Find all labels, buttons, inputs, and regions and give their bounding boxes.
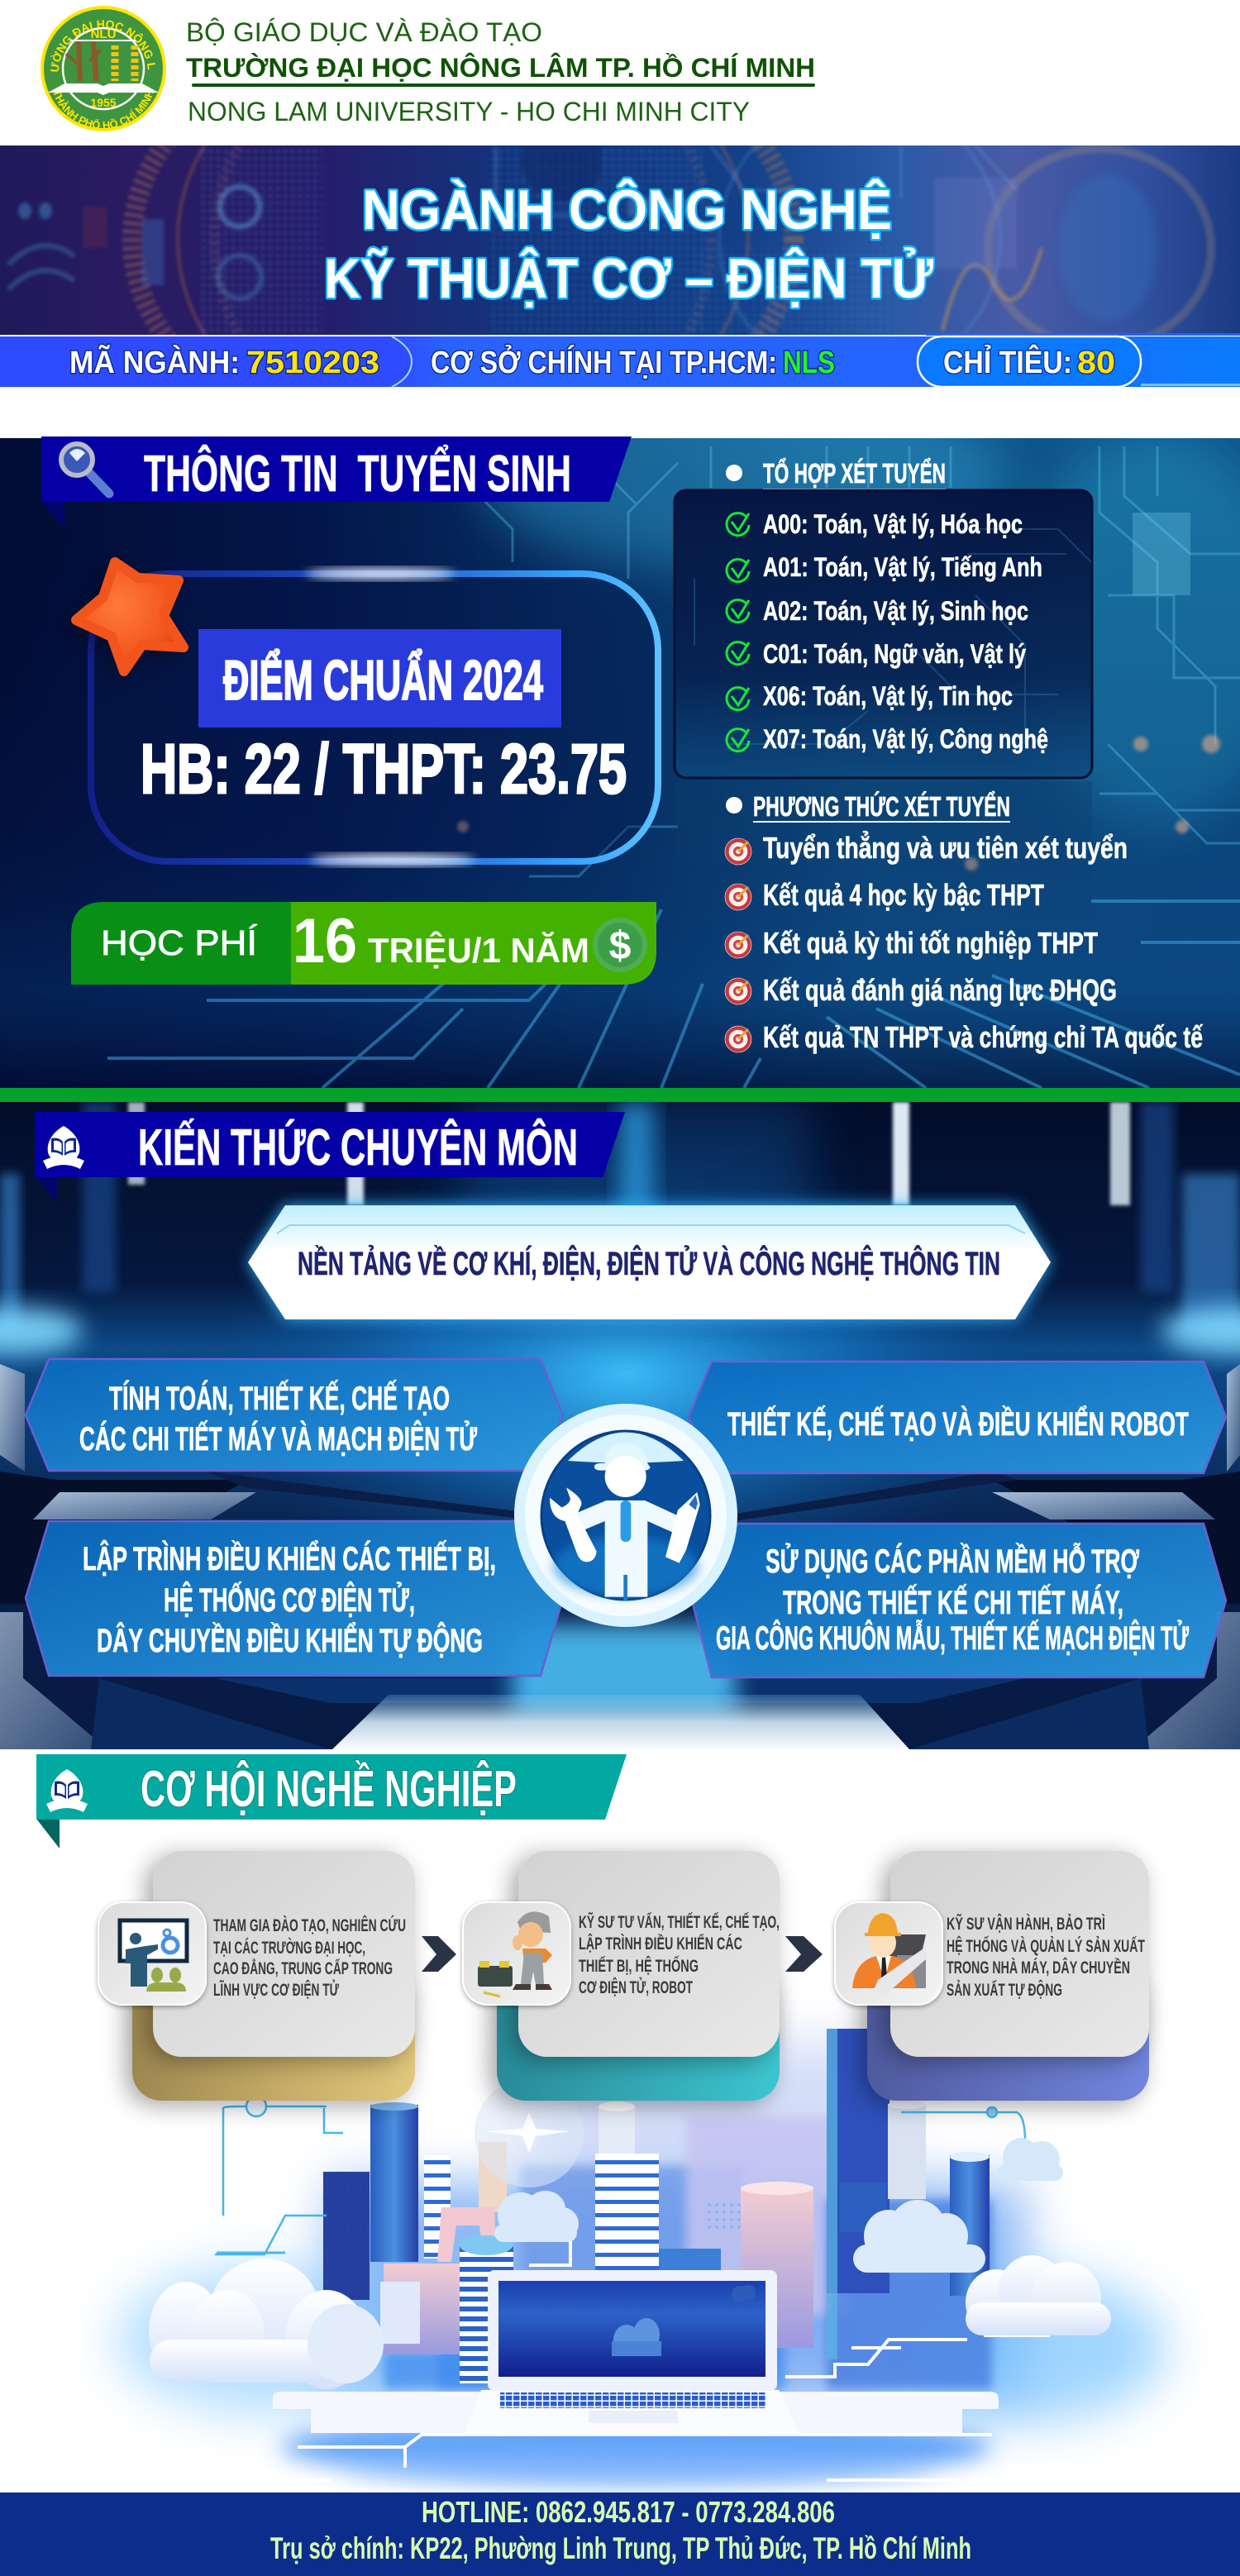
heading: admission information xyxy=(41,436,632,527)
pill: quota: 80 xyxy=(1077,346,1115,380)
text: consulting engineer: THIẾT BỊ, HỆ THỐNG xyxy=(579,1956,699,1976)
icon: teacher at board xyxy=(120,1920,187,1992)
illustration: smart city on a laptop xyxy=(116,2029,1166,2484)
icon: construction engineer xyxy=(852,1913,926,1994)
text: hotline: HOTLINE: 0862.945.817 - 0773.284.806 xyxy=(422,2495,835,2529)
text: teaching and research: LĨNH VỰC CƠ ĐIỆN TỬ xyxy=(213,1980,339,2000)
background: circuit board texture xyxy=(0,389,1240,1088)
text: operations engineer: KỸ SƯ VẬN HÀNH, BẢO TRÌ xyxy=(947,1914,1105,1934)
callout: tuition: HỌC PHÍ xyxy=(101,923,257,963)
box: software support xyxy=(692,1524,1226,1677)
panel: admission methods xyxy=(725,791,1204,1054)
label: score heading xyxy=(198,629,561,727)
box: calculation and design: CÁC CHI TIẾT MÁY VÀ MẠCH ĐIỆN TỬ xyxy=(79,1419,478,1457)
title xyxy=(324,178,934,310)
logo: Nong Lam University seal xyxy=(41,6,166,131)
heading: admission methods: PHƯƠNG THỨC XÉT TUYỂN xyxy=(753,791,1010,822)
box: calculation and design: TÍNH TOÁN, THIẾT KẾ, CHẾ TẠO xyxy=(109,1379,450,1417)
arrow: second to third xyxy=(785,1936,823,1972)
text: teaching and research xyxy=(213,1915,406,2000)
heading: subject combinations: TỔ HỢP XÉT TUYỂN xyxy=(763,458,946,489)
list: admission methods xyxy=(725,830,1204,1054)
text: ministry line: BỘ GIÁO DỤC VÀ ĐÀO TẠO xyxy=(186,17,542,47)
info bar: major code, campus, quota xyxy=(0,333,1240,387)
arrow: first to second xyxy=(422,1936,456,1972)
list: admission methods: Tuyển thẳng và ưu tiên xét tuyển xyxy=(763,830,1128,865)
list: admission methods: Kết quả kỳ thi tốt nghiệp THPT xyxy=(763,926,1098,960)
text: operations engineer: HỆ THỐNG VÀ QUẢN LÝ SẢN XUẤT xyxy=(947,1936,1145,1956)
divider under university name xyxy=(192,83,815,87)
text: major code xyxy=(69,344,379,380)
callout: tuition: 16 xyxy=(293,906,357,976)
text: score values: HB: 22 / THPT: 23.75 xyxy=(141,730,627,808)
heading: professional knowledge xyxy=(35,1112,625,1203)
card: teaching and research xyxy=(98,1851,415,2101)
text: campus: NLS xyxy=(783,346,835,380)
text: major code: 7510203 xyxy=(246,346,379,380)
logo: Nong Lam University seal: THÀNH PHỐ HỒ CHÍ MINH xyxy=(53,93,154,128)
title: NGÀNH CÔNG NGHỆ xyxy=(362,178,892,241)
background: sci-fi hall xyxy=(0,1102,1240,1749)
box: combination list: A01: Toán, Vật lý, Tiếng Anh xyxy=(763,552,1042,582)
box: programming control: DÂY CHUYỀN ĐIỀU KHIỂN TỰ ĐỘNG xyxy=(97,1620,483,1659)
icon: magnifier xyxy=(61,444,109,494)
text: teaching and research: TẠI CÁC TRƯỜNG ĐẠI HỌC, xyxy=(213,1938,365,1958)
box: foundation knowledge xyxy=(248,1205,1051,1319)
bullet xyxy=(726,797,742,813)
box: combination list: A00: Toán, Vật lý, Hóa học xyxy=(763,509,1023,539)
bullet xyxy=(726,465,742,481)
icon: dollar coin: $ xyxy=(609,924,632,968)
pill: quota xyxy=(918,336,1141,387)
heading: career opportunities xyxy=(36,1754,627,1849)
card: consulting engineer xyxy=(463,1851,780,2101)
callout: admission score 2024 xyxy=(76,562,658,865)
box: combination list: A02: Toán, Vật lý, Sinh học xyxy=(763,596,1028,626)
text: teaching and research: THAM GIA ĐÀO TẠO, NGHIÊN CỨU xyxy=(213,1915,406,1935)
panel: admission information xyxy=(0,389,1240,1088)
icon: book crest xyxy=(43,1126,84,1169)
box: combination list xyxy=(675,490,1092,778)
laptop xyxy=(273,2270,999,2433)
text: major code: MÃ NGÀNH: xyxy=(69,344,240,380)
icon: book crest xyxy=(46,1769,88,1812)
text: operations engineer xyxy=(947,1914,1145,2000)
logo: Nong Lam University seal: 1955 xyxy=(90,96,117,109)
callout: tuition xyxy=(71,902,656,985)
footer: contact xyxy=(0,2493,1240,2576)
green divider band xyxy=(0,1088,1240,1102)
box: programming control: LẬP TRÌNH ĐIỀU KHIỂN CÁC THIẾT BỊ, xyxy=(83,1538,496,1577)
box: programming control xyxy=(26,1521,563,1676)
banner: major title xyxy=(0,145,1240,335)
panel: career opportunities xyxy=(36,1754,1166,2484)
panel: professional knowledge xyxy=(0,1102,1240,1749)
icon: orange star xyxy=(76,562,184,671)
box: combination list: C01: Toán, Ngữ văn, Vật lý xyxy=(763,639,1026,669)
clouds xyxy=(149,2138,1111,2389)
box: robots xyxy=(689,1362,1226,1473)
circuit traces xyxy=(215,2097,1025,2254)
icon: engineer emblem xyxy=(514,1404,737,1627)
heading: professional knowledge: KIẾN THỨC CHUYÊN MÔN xyxy=(138,1119,578,1176)
list: admission methods: Kết quả 4 học kỳ bậc THPT xyxy=(763,878,1044,912)
text: operations engineer: SẢN XUẤT TỰ ĐỘNG xyxy=(947,1980,1062,2000)
text: english name: NONG LAM UNIVERSITY - HO CHI MINH CITY xyxy=(188,97,750,126)
heading: admission information: THÔNG TIN TUYỂN SINH xyxy=(144,446,571,503)
callout: tuition: TRIỆU/1 NĂM xyxy=(368,930,589,970)
panel: subject combinations xyxy=(675,458,1092,778)
text: consulting engineer: KỸ SƯ TƯ VẤN, THIẾT KẾ, CHẾ TẠO, xyxy=(579,1913,780,1932)
title: KỸ THUẬT CƠ – ĐIỆN TỬ xyxy=(324,246,934,310)
icon: mechanic with toolbox xyxy=(478,1911,552,1996)
text: campus: CƠ SỞ CHÍNH TẠI TP.HCM: xyxy=(431,344,777,380)
pill: quota: CHỈ TIÊU: xyxy=(943,344,1072,380)
text: university name: TRƯỜNG ĐẠI HỌC NÔNG LÂM TP. HỒ CHÍ MINH xyxy=(186,53,815,83)
box: combination list: X06: Toán, Vật lý, Tin học xyxy=(763,681,1013,711)
text: consulting engineer xyxy=(579,1913,780,1997)
card: operations engineer xyxy=(835,1851,1149,2101)
text: operations engineer: TRONG NHÀ MÁY, DÂY CHUYỀN xyxy=(947,1958,1130,1977)
header: university identity xyxy=(41,6,815,131)
text: consulting engineer: LẬP TRÌNH ĐIỀU KHIỂN CÁC xyxy=(579,1934,742,1953)
list: admission methods: Kết quả đánh giá năng lực ĐHQG xyxy=(763,973,1117,1007)
soft background glow xyxy=(116,2042,1166,2484)
box: combination list: X07: Toán, Vật lý, Công nghệ xyxy=(763,724,1048,754)
box: programming control: HỆ THỐNG CƠ ĐIỆN TỬ, xyxy=(164,1581,415,1619)
text: teaching and research: CAO ĐẲNG, TRUNG CẤP TRONG xyxy=(213,1959,393,1978)
box: calculation and design xyxy=(26,1359,563,1471)
text: consulting engineer: CƠ ĐIỆN TỬ, ROBOT xyxy=(579,1977,693,1997)
icon: dollar coin xyxy=(593,918,647,972)
label: score heading: ĐIỂM CHUẨN 2024 xyxy=(223,648,543,712)
heading: career opportunities: CƠ HỘI NGHỀ NGHIỆP xyxy=(141,1761,517,1818)
logo: Nong Lam University seal: NLU xyxy=(91,27,116,41)
towers xyxy=(323,2029,990,2383)
